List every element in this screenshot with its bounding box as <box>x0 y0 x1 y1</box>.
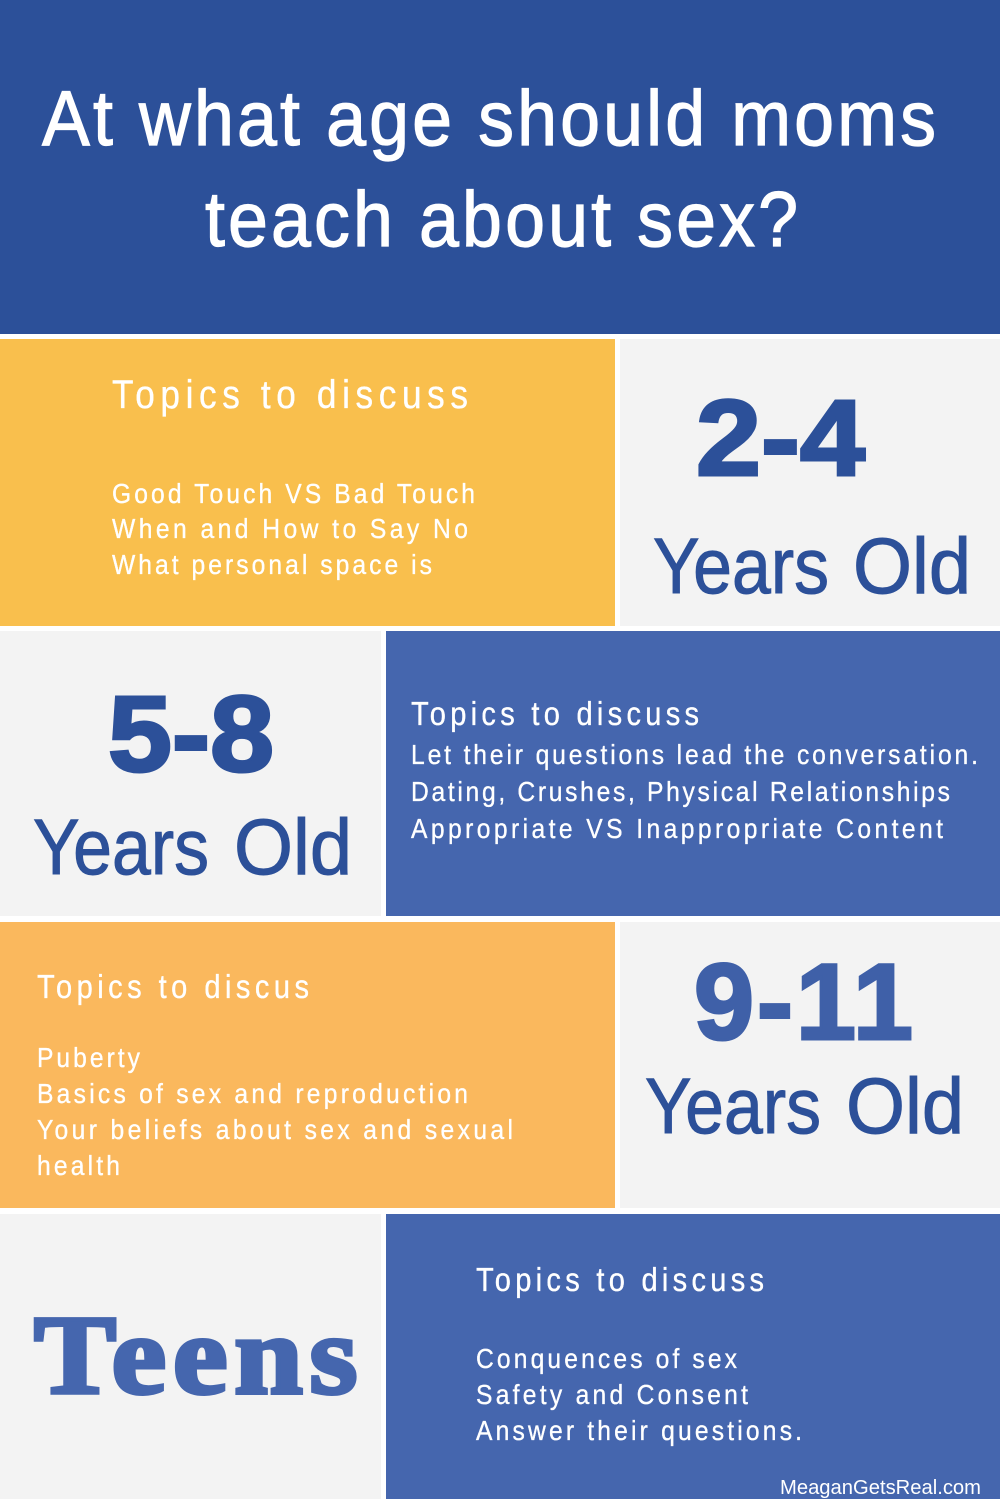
age label <box>33 802 352 891</box>
panel: age 9-11 <box>620 922 1000 1208</box>
text block: topics list: Good Touch VS Bad Touch <box>112 478 475 509</box>
text block: topics list: Conquences of sex <box>476 1343 737 1374</box>
text block: topics list <box>476 1343 802 1446</box>
panel: teens <box>0 1214 381 1499</box>
heading: topics to discuss: Topics to discuss <box>411 695 699 732</box>
text block: topics list <box>112 478 475 580</box>
panel: topics for ages 9-11 <box>0 922 615 1208</box>
age label <box>653 521 971 610</box>
age label: Old <box>234 802 352 891</box>
text block: topics list: When and How to Say No <box>112 513 468 544</box>
text block: topics list: Basics of sex and reproduction <box>37 1078 468 1109</box>
text block: topics list: What personal space is <box>112 549 432 580</box>
text block: topics list: Safety and Consent <box>476 1379 749 1410</box>
text block: topics list: health <box>37 1150 120 1181</box>
age label: Old <box>846 1061 964 1150</box>
heading: topics to discuss: Topics to discuss <box>112 372 468 416</box>
title <box>42 74 936 263</box>
age range number: 2-4 <box>696 377 865 498</box>
title: teach about sex? <box>205 175 798 263</box>
text block: topics list: Your beliefs about sex and sexual <box>37 1114 513 1145</box>
age range number: 5-8 <box>108 673 274 794</box>
panel: topics for ages 2-4 <box>0 339 615 626</box>
heading: topics to discuss: Topics to discus <box>37 968 309 1005</box>
text block: topics list: Dating, Crushes, Physical Relationships <box>411 776 950 807</box>
panel: age 5-8 <box>0 631 381 916</box>
age label: Years <box>653 521 829 610</box>
age group label: Teens <box>34 1294 357 1418</box>
text block: topics list: Let their questions lead the conversation. <box>411 739 978 770</box>
text block: topics list: Appropriate VS Inappropriate Content <box>411 813 944 844</box>
website credit: MeaganGetsReal.com <box>780 1477 981 1499</box>
age label <box>645 1061 964 1150</box>
heading: topics to discuss: Topics to discuss <box>476 1261 764 1298</box>
panel: age 2-4 <box>620 339 1000 626</box>
text block: topics list: Answer their questions. <box>476 1415 802 1446</box>
age label: Old <box>853 521 971 610</box>
panel: title header <box>0 0 1000 334</box>
text block: topics list: Puberty <box>37 1042 141 1073</box>
age range number: 9-11 <box>694 941 913 1062</box>
panel: topics for teens <box>386 1214 1000 1499</box>
age label: Years <box>645 1061 821 1150</box>
text block: topics list <box>411 739 978 844</box>
text block: topics list <box>37 1042 513 1181</box>
age label: Years <box>33 802 209 891</box>
panel: topics for ages 5-8 <box>386 631 1000 916</box>
title: At what age should moms <box>42 74 936 162</box>
